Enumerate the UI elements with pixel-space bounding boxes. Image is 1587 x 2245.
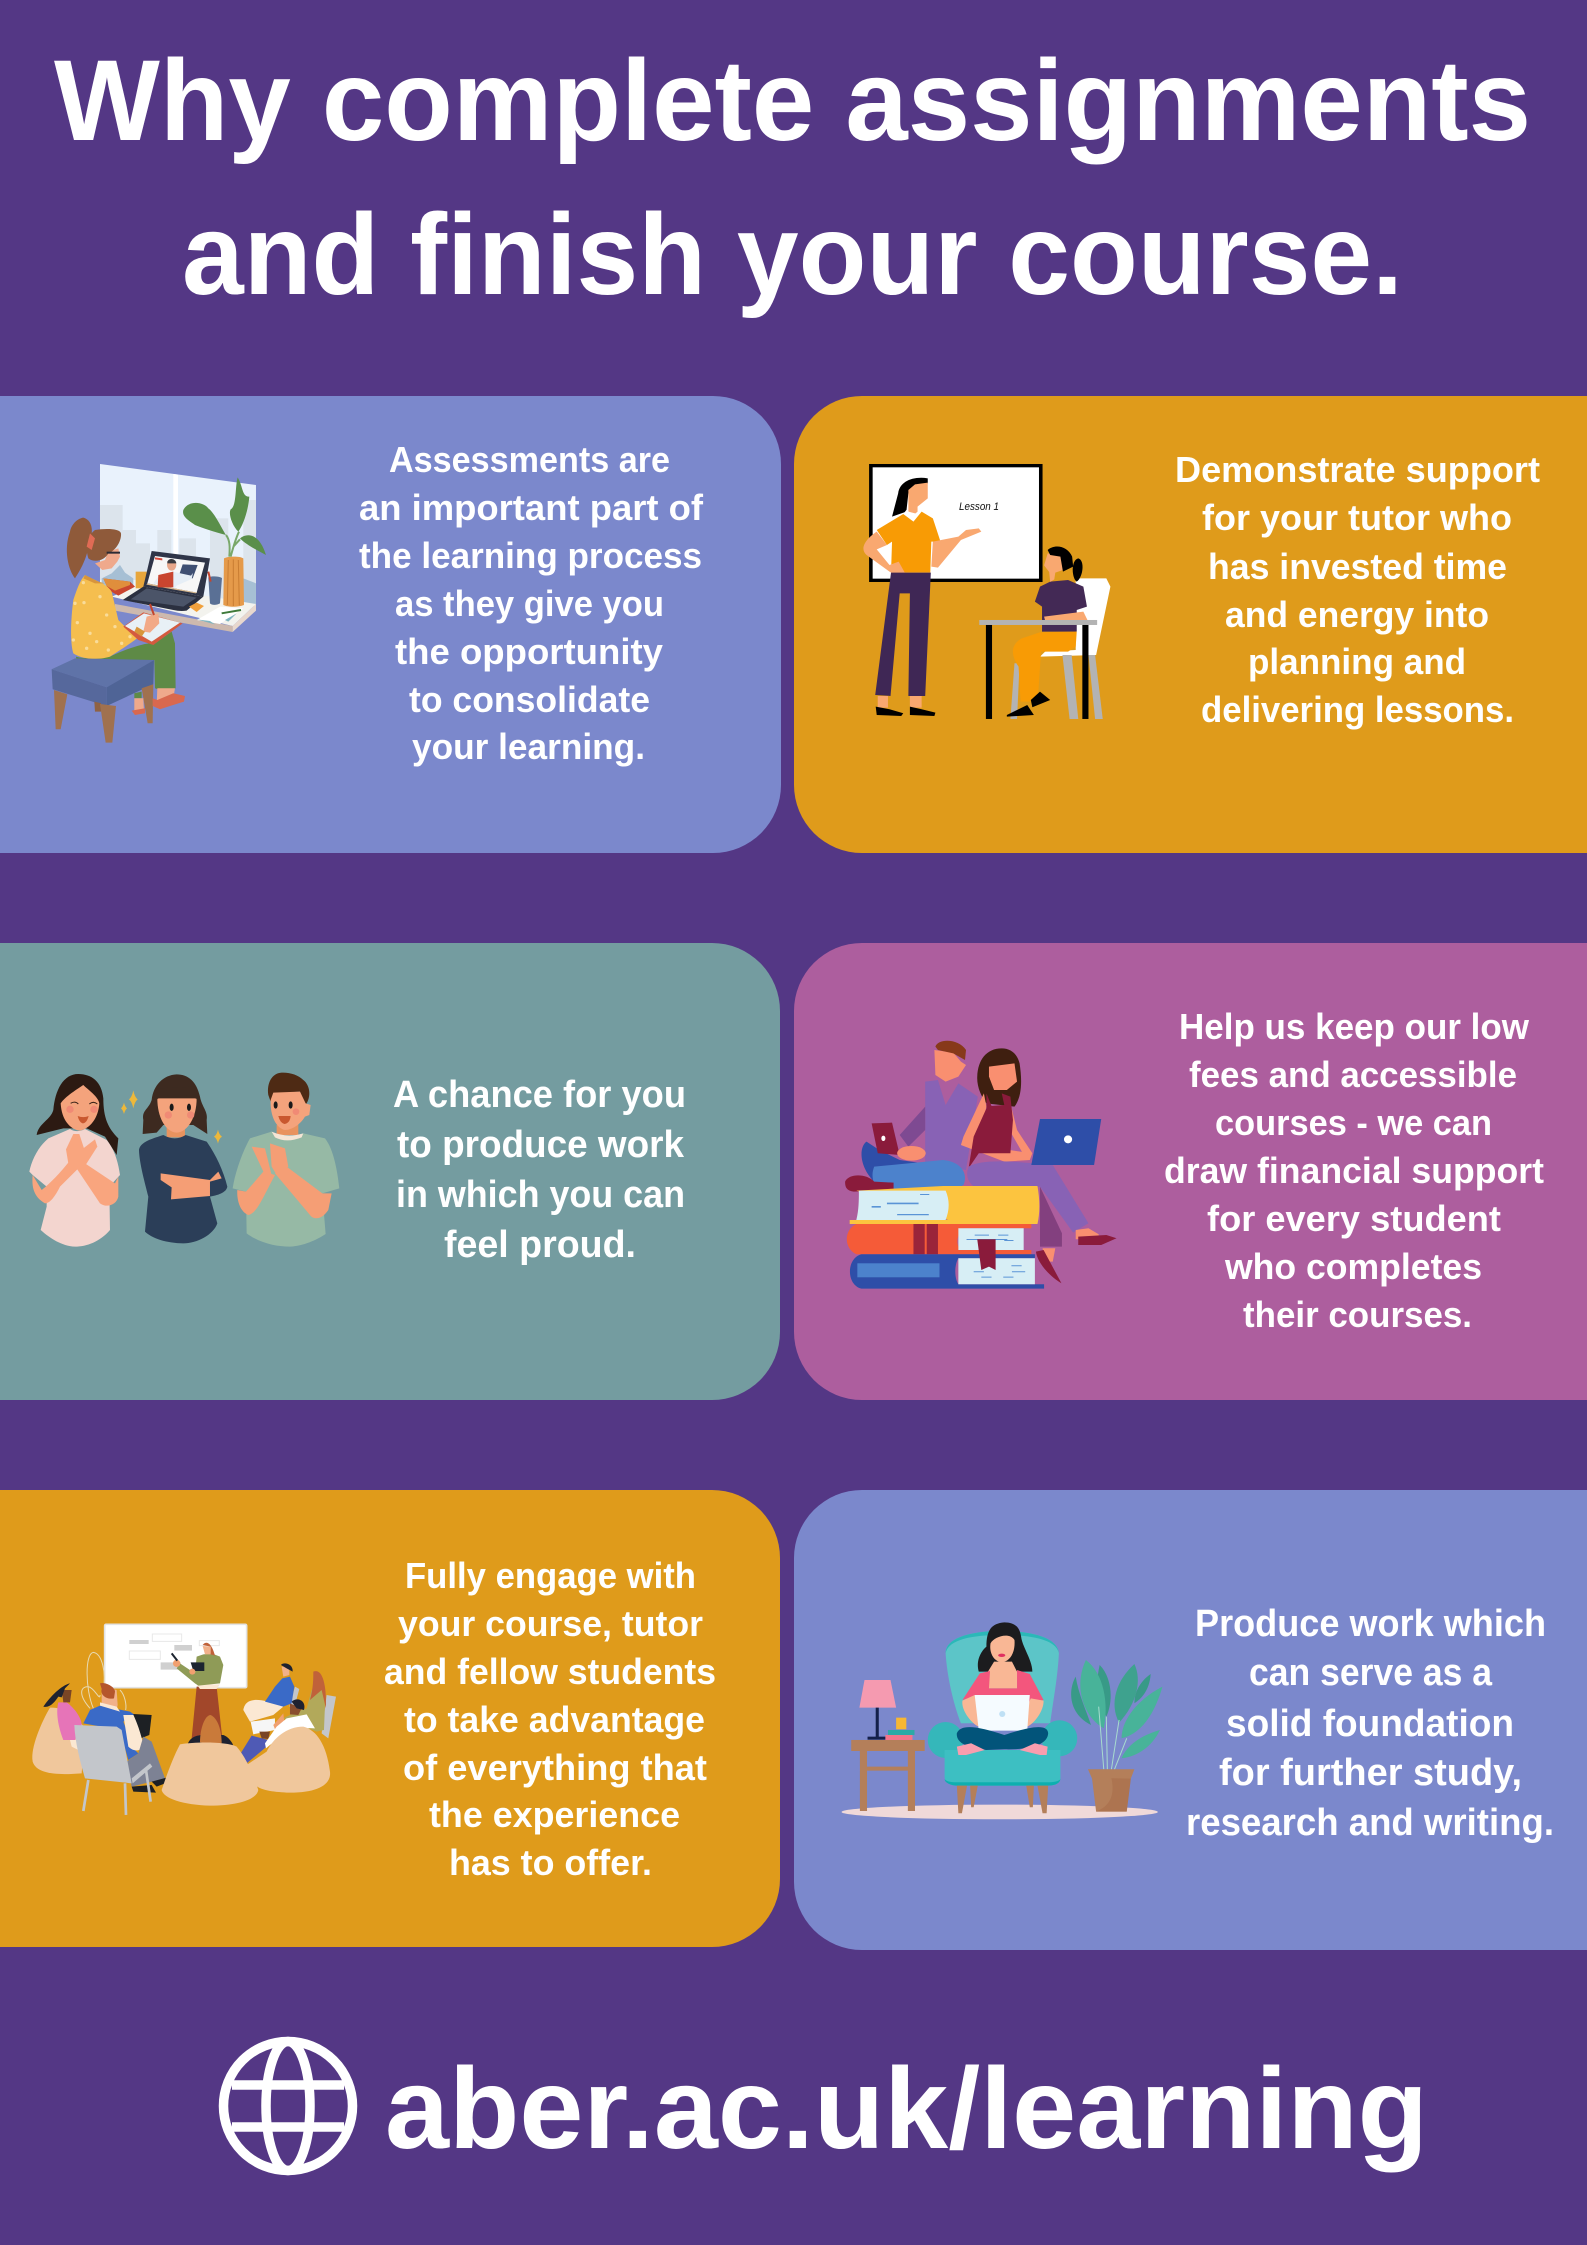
text: assessments: the opportunity	[395, 631, 664, 672]
text: assessments: as they give you	[395, 583, 664, 624]
text: low fees: for every student	[1207, 1198, 1501, 1239]
text: engage: to take advantage	[404, 1699, 705, 1740]
illustration: woman in armchair	[842, 1622, 1162, 1819]
icon: globe	[224, 2042, 352, 2170]
text: engage: has to offer.	[449, 1842, 652, 1883]
text: assessments: an important part of	[359, 487, 704, 528]
panel: feel proud	[0, 943, 780, 1400]
title: and finish your course.	[182, 191, 1403, 319]
text: further study: can serve as a	[1249, 1652, 1493, 1694]
text: feel proud	[393, 1074, 686, 1266]
text: further study: for further study,	[1219, 1752, 1522, 1794]
panel: tutor support	[794, 396, 1587, 853]
text: low fees: Help us keep our low	[1179, 1006, 1530, 1047]
panel: engage	[0, 1490, 780, 1947]
illustration: teacher and student	[863, 464, 1110, 719]
text: tutor support: delivering lessons.	[1201, 689, 1514, 730]
panel: low fees	[794, 943, 1587, 1400]
text: low fees: their courses.	[1243, 1294, 1472, 1335]
text: feel proud: to produce work	[397, 1124, 685, 1166]
text: further study: research and writing.	[1186, 1802, 1554, 1844]
panel: assessments	[0, 396, 781, 853]
illustration: three people clapping	[29, 1073, 339, 1247]
text: tutor support	[1175, 449, 1540, 730]
panel: further study	[794, 1490, 1587, 1950]
title	[54, 37, 1531, 319]
text: low fees: fees and accessible	[1189, 1054, 1517, 1095]
illustration: two students on books	[845, 1041, 1117, 1289]
text: tutor support: has invested time	[1208, 546, 1507, 587]
text: tutor support: Demonstrate support	[1175, 449, 1540, 490]
footer: website	[224, 2042, 1428, 2173]
text: engage: of everything that	[403, 1747, 707, 1788]
text: assessments	[359, 439, 704, 767]
text: low fees: draw financial support	[1164, 1150, 1544, 1191]
text: further study: solid foundation	[1226, 1703, 1514, 1745]
text: further study	[1186, 1603, 1554, 1844]
text: assessments: Assessments are	[389, 439, 670, 480]
illustration: student at laptop by window	[52, 464, 266, 743]
text: engage: Fully engage with	[405, 1555, 696, 1596]
illustration: group class	[32, 1624, 336, 1815]
text: engage	[384, 1555, 716, 1883]
text: assessments: to consolidate	[409, 679, 650, 720]
text: assessments: your learning.	[412, 726, 645, 767]
text: low fees: courses - we can	[1215, 1102, 1492, 1143]
text: feel proud: in which you can	[396, 1174, 685, 1216]
text: low fees	[1164, 1006, 1544, 1335]
text: engage: your course, tutor	[398, 1603, 703, 1644]
text: feel proud: A chance for you	[393, 1074, 686, 1116]
title: Why complete assignments	[54, 37, 1531, 165]
text: engage: and fellow students	[384, 1651, 716, 1692]
text: tutor support: and energy into	[1225, 594, 1489, 635]
text: assessments: the learning process	[359, 535, 702, 576]
text: feel proud: feel proud.	[444, 1224, 636, 1266]
website url: aber.ac.uk/learning	[385, 2045, 1428, 2173]
text: further study: Produce work which	[1195, 1603, 1546, 1645]
text: tutor support: for your tutor who	[1202, 497, 1512, 538]
text: engage: the experience	[429, 1794, 680, 1835]
whiteboard label: Lesson 1	[959, 501, 999, 513]
text: low fees: who completes	[1224, 1246, 1482, 1287]
text: tutor support: planning and	[1248, 641, 1466, 682]
